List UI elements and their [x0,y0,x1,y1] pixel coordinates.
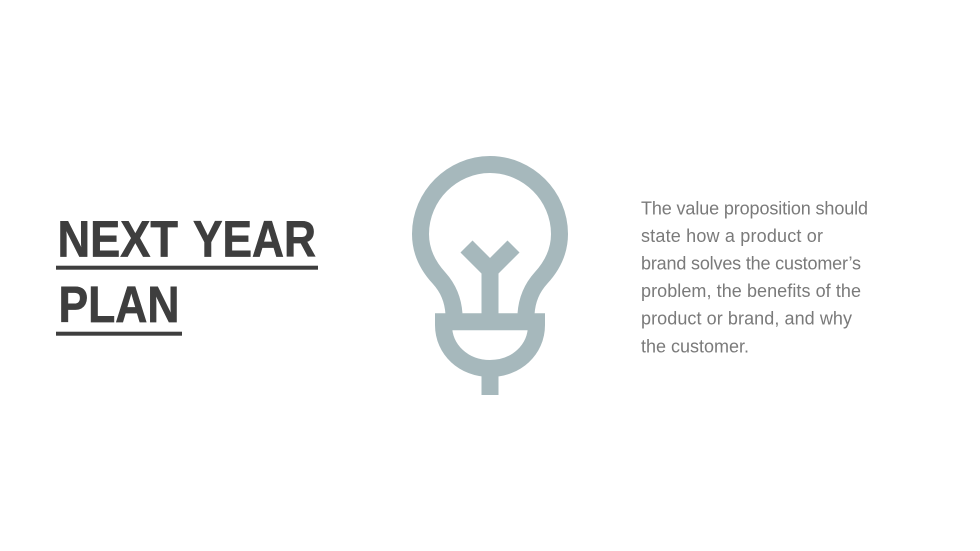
title line 2 underline [56,332,182,336]
body line 4: problem, the benefits of the [641,281,861,301]
title: next year plan [56,210,318,336]
body line 3: brand solves the customer’s [641,254,861,274]
title line 1 underline [56,266,318,270]
filament [466,246,514,320]
title line 1: NEXT [58,210,178,268]
body line 2: state how a product or [641,226,823,246]
body line 1: The value proposition should [641,198,868,218]
body text [641,198,868,356]
base stem [482,368,498,395]
title line 2: PLAN [58,276,180,333]
bulb glass outline [420,164,560,314]
icon: light bulb [420,164,560,395]
body line 6: the customer. [641,336,749,356]
body line 5: product or brand, and why [641,309,852,329]
bulb base [444,322,536,368]
title line 1: YEAR [193,210,316,268]
